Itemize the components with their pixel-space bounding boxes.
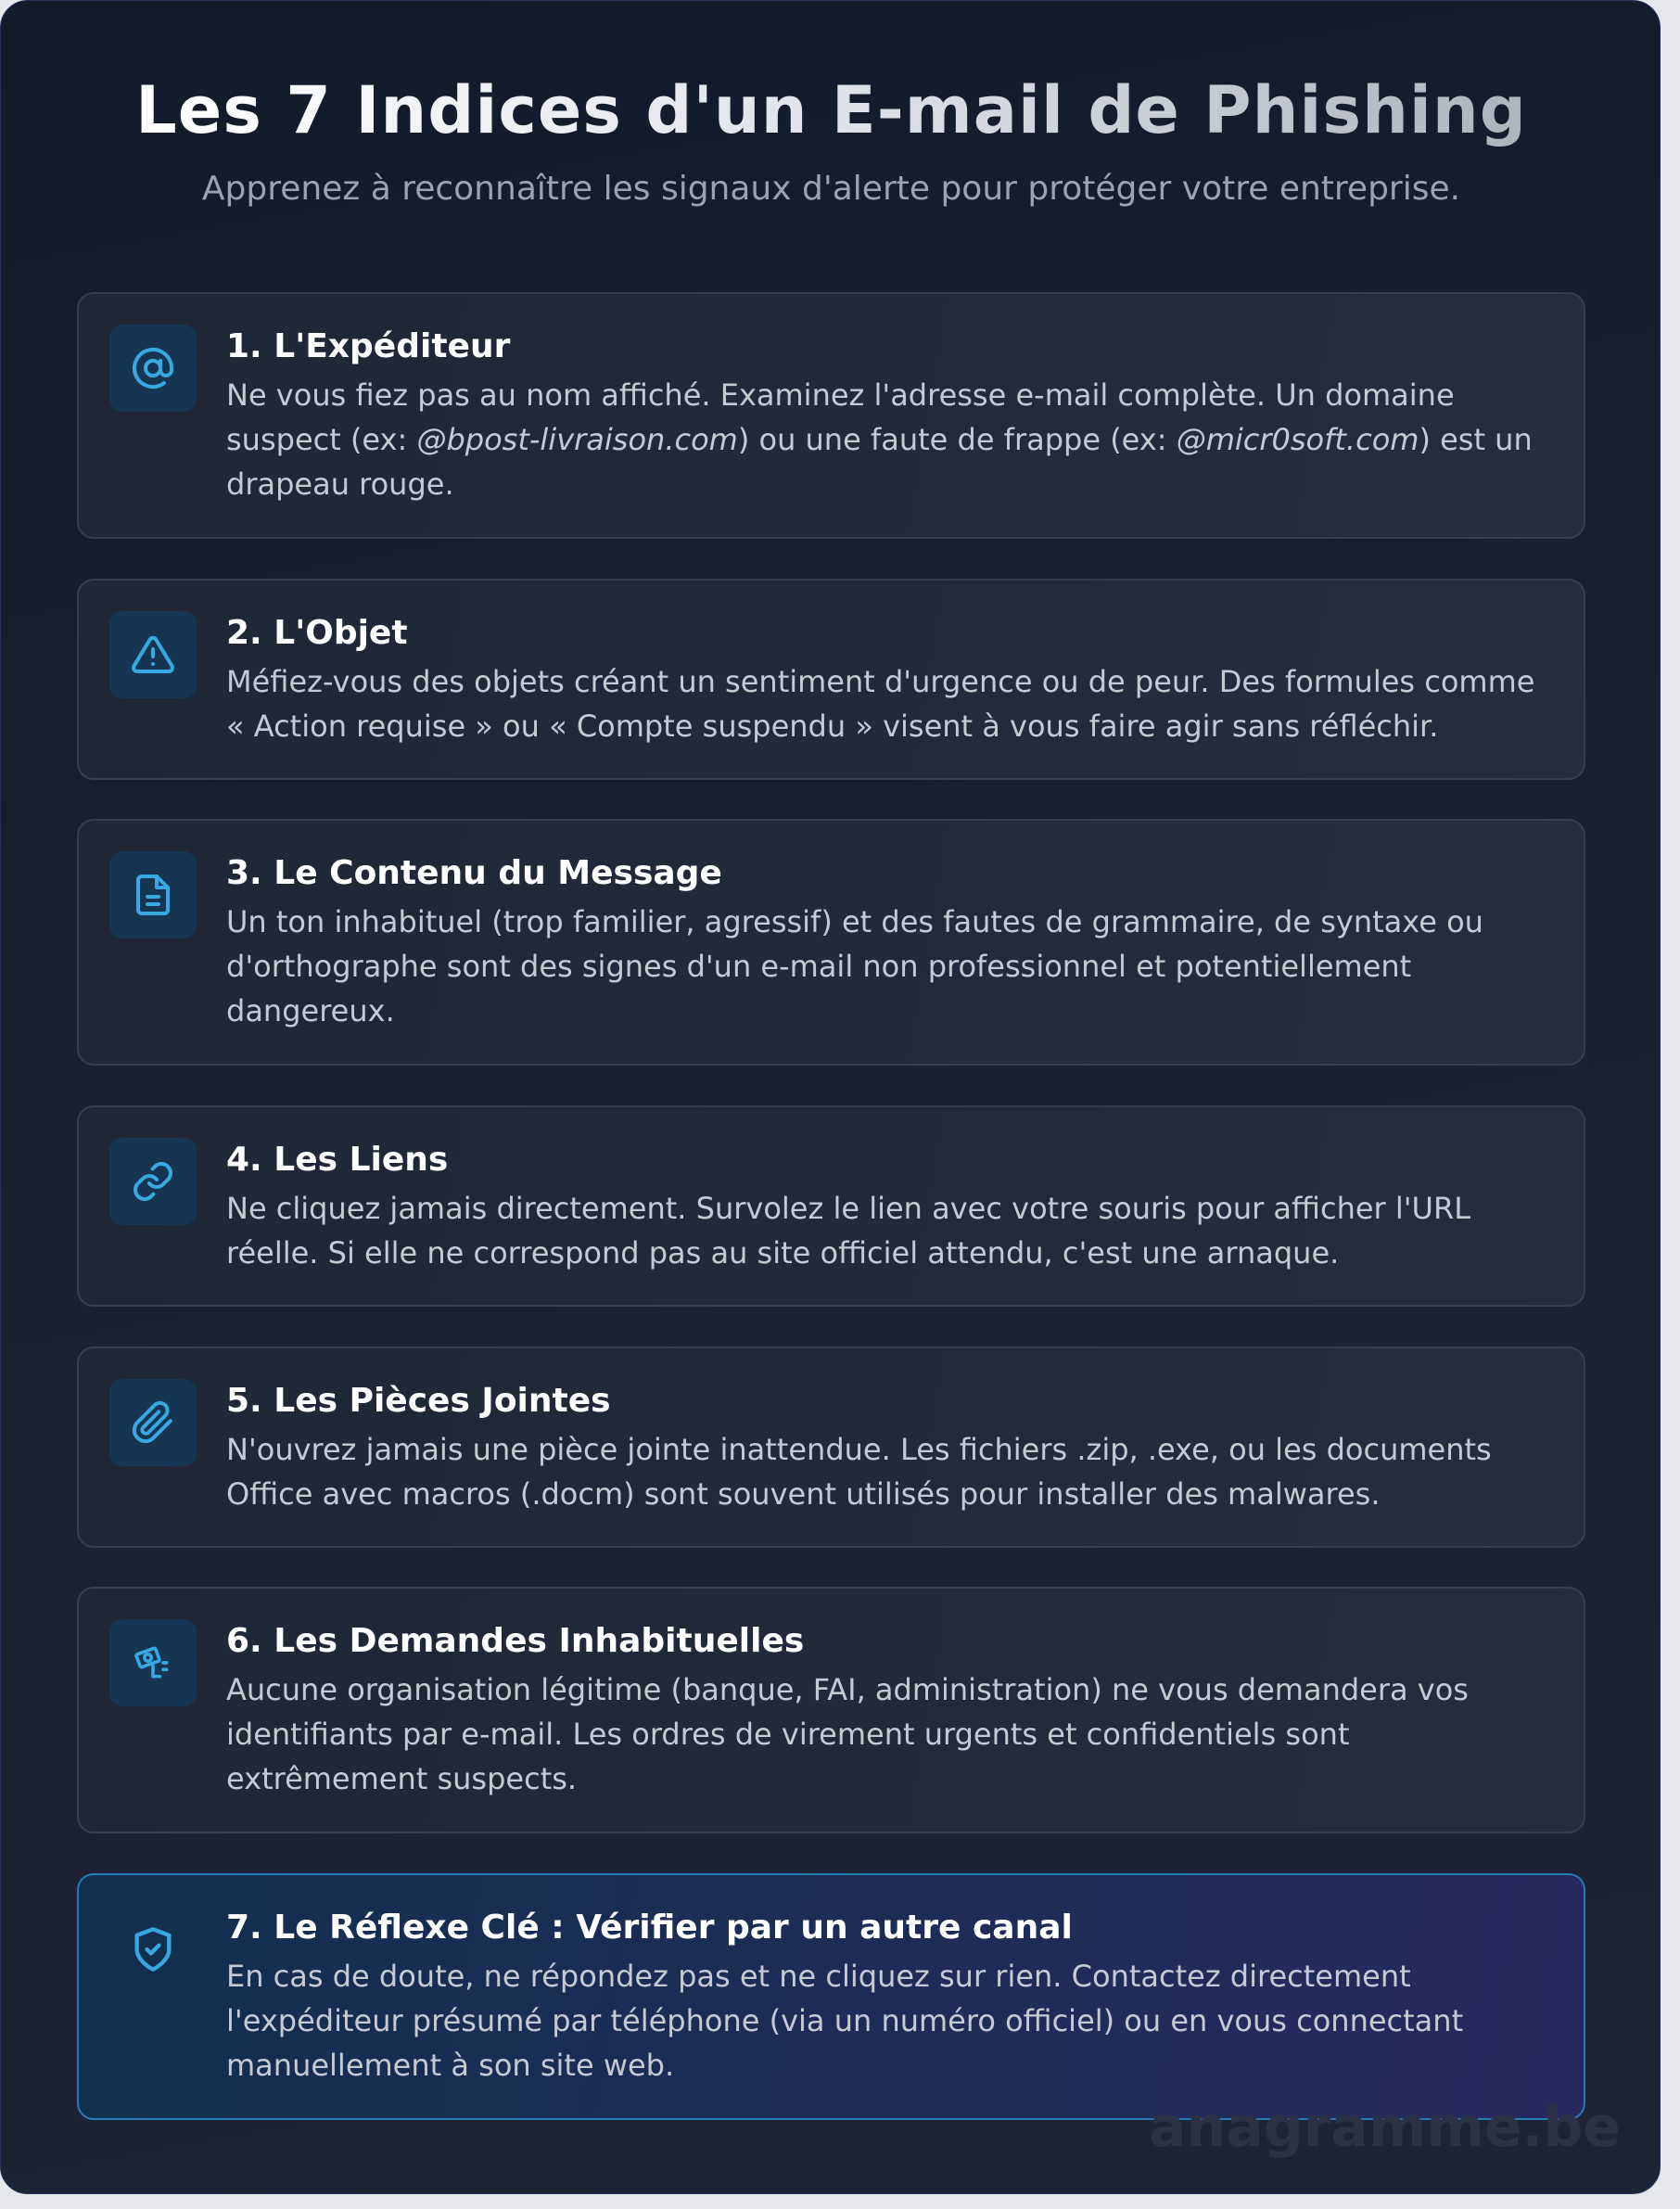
panel: 1 expéditeur xyxy=(77,292,1585,539)
title: Les 7 Indices d'un E-mail de Phishing xyxy=(135,72,1527,148)
watermark: anagramme.be xyxy=(1149,2095,1621,2160)
text: Aucune organisation légitime (banque, FAI, administration) ne vous demandera vos xyxy=(226,1672,1469,1707)
panel: 4 liens xyxy=(77,1105,1585,1307)
panel: 6 demandes xyxy=(77,1587,1585,1833)
text: Méfiez-vous des objets créant un sentiment d'urgence ou de peur. Des formules comme xyxy=(226,664,1534,699)
heading: 6. Les Demandes Inhabituelles xyxy=(226,1622,804,1660)
icon: at sign xyxy=(109,325,197,412)
panel: 2 objet xyxy=(77,579,1585,780)
text: « Action requise » ou « Compte suspendu » visent à vous faire agir sans réfléchir. xyxy=(226,709,1438,744)
text: d'orthographe sont des signes d'un e-mail non professionnel et potentiellement xyxy=(226,949,1411,984)
text xyxy=(226,1191,1470,1270)
icon: paperclip xyxy=(109,1379,197,1466)
text: Ne cliquez jamais directement. Survolez le lien avec votre souris pour afficher l'URL xyxy=(226,1191,1470,1226)
heading: 5. Les Pièces Jointes xyxy=(226,1382,611,1420)
heading: 1. L'Expéditeur xyxy=(226,327,510,365)
text: extrêmement suspects. xyxy=(226,1761,577,1796)
text xyxy=(226,904,1483,1028)
text: Un ton inhabituel (trop familier, agressif) et des fautes de grammaire, de syntaxe ou xyxy=(226,904,1483,939)
icon: money hand xyxy=(109,1619,197,1706)
text: manuellement à son site web. xyxy=(226,2048,674,2083)
icon: document xyxy=(109,851,197,939)
text: réelle. Si elle ne correspond pas au site officiel attendu, c'est une arnaque. xyxy=(226,1235,1339,1270)
text xyxy=(226,1432,1492,1512)
text xyxy=(226,1959,1463,2083)
text xyxy=(226,1672,1469,1796)
icon: warning xyxy=(109,611,197,698)
text: Office avec macros (.docm) sont souvent utilisés pour installer des malwares. xyxy=(226,1476,1380,1512)
text: dangereux. xyxy=(226,993,395,1028)
panel: 5 pièces jointes xyxy=(77,1347,1585,1548)
text: suspect (ex: @bpost-livraison.com) ou une faute de frappe (ex: @micr0soft.com) est un xyxy=(226,422,1533,457)
text: En cas de doute, ne répondez pas et ne cliquez sur rien. Contactez directement xyxy=(226,1959,1411,1994)
text xyxy=(226,664,1534,744)
text: N'ouvrez jamais une pièce jointe inattendue. Les fichiers .zip, .exe, ou les documents xyxy=(226,1432,1492,1467)
text xyxy=(226,377,1533,502)
heading: 2. L'Objet xyxy=(226,614,408,652)
icon: shield check xyxy=(135,1927,171,1972)
heading: 7. Le Réflexe Clé : Vérifier par un autre canal xyxy=(226,1909,1073,1947)
icon: link xyxy=(109,1138,197,1225)
heading: 4. Les Liens xyxy=(226,1141,448,1179)
text: identifiants par e-mail. Les ordres de virement urgents et confidentiels sont xyxy=(226,1717,1349,1752)
text: l'expéditeur présumé par téléphone (via un numéro officiel) ou en vous connectant xyxy=(226,2003,1463,2038)
panel: 7 réflexe clé xyxy=(77,1873,1585,2120)
panel: 3 contenu xyxy=(77,819,1585,1066)
heading: 3. Le Contenu du Message xyxy=(226,854,722,892)
text: drapeau rouge. xyxy=(226,466,454,502)
subtitle: Apprenez à reconnaître les signaux d'alerte pour protéger votre entreprise. xyxy=(202,170,1460,208)
text: Ne vous fiez pas au nom affiché. Examinez l'adresse e-mail complète. Un domaine xyxy=(226,377,1455,413)
